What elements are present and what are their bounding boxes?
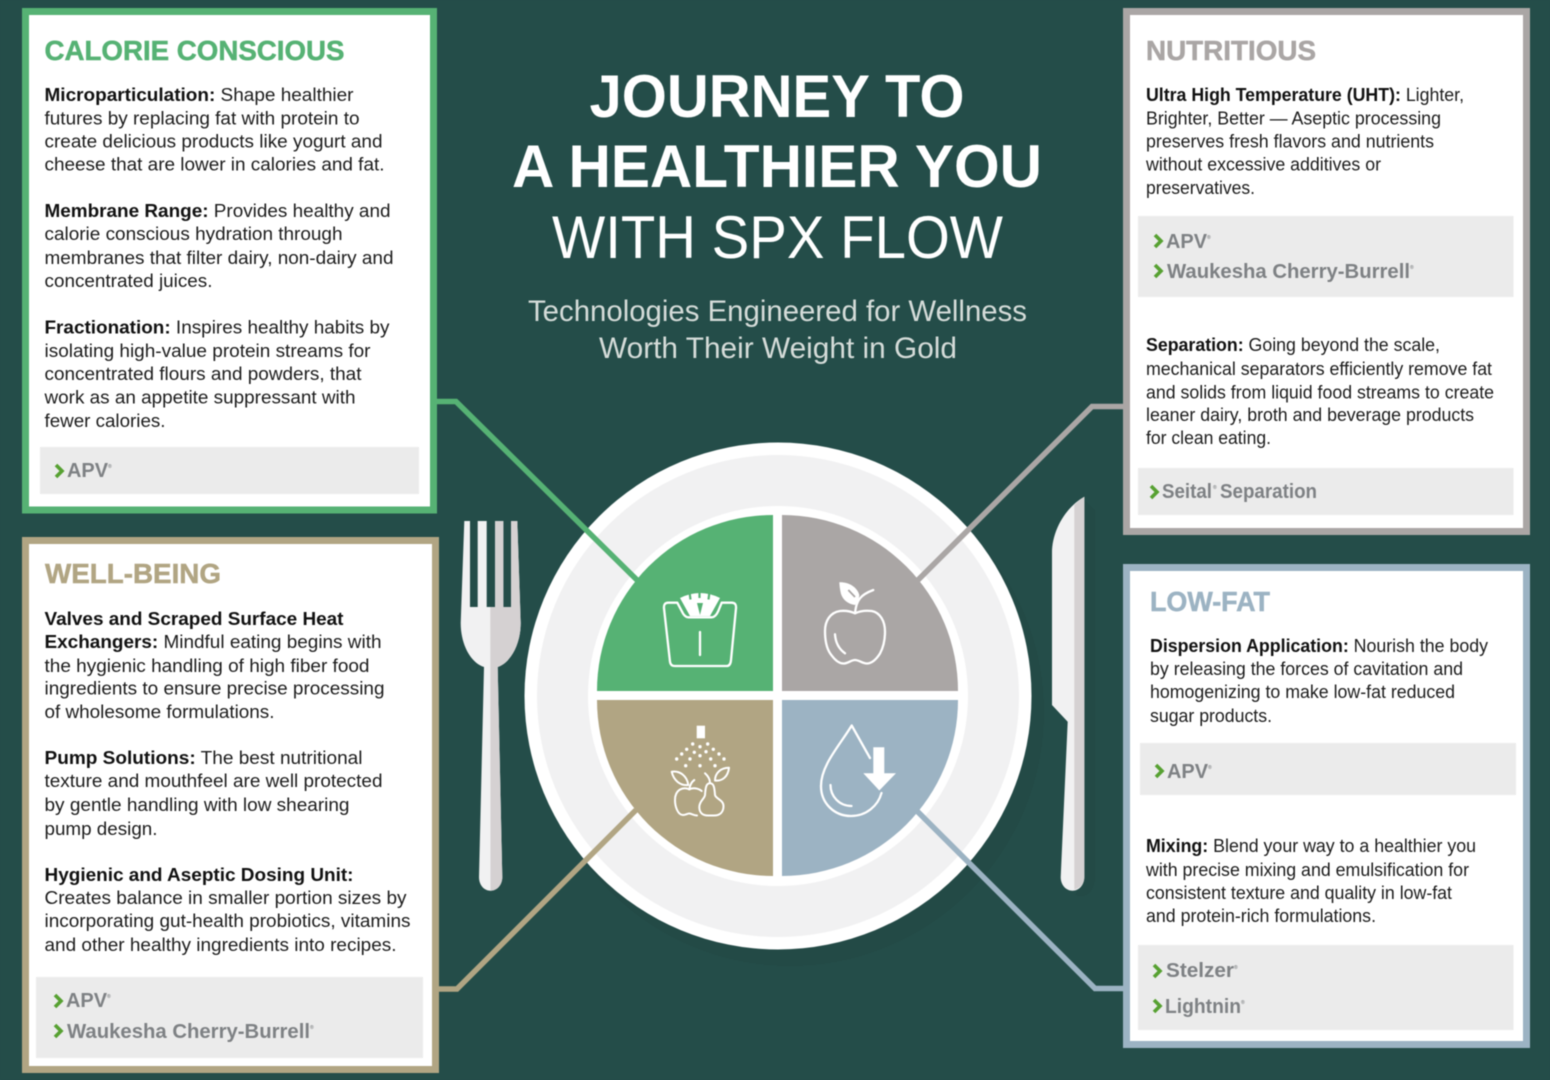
title: JOURNEY TO — [590, 63, 964, 130]
text block: separation: leaner dairy, broth and beverage products — [1146, 404, 1474, 425]
text block: membrane range: Membrane Range: Provides healthy and — [44, 200, 390, 221]
brand box: APV and Waukesha Cherry-Burrell: Waukesha Cherry-Burrell — [1167, 261, 1410, 283]
quadrant: tan well-being — [597, 700, 773, 876]
text block: microparticulation: create delicious products like yogurt and — [44, 130, 382, 152]
brand box: APV: APV — [67, 460, 109, 482]
text block: dispersion application: Dispersion Application: Nourish the body — [1150, 635, 1489, 656]
text block: separation — [1146, 334, 1494, 448]
quadrant: green calorie conscious — [597, 515, 773, 691]
quadrant: blue low-fat — [782, 700, 958, 876]
text block: membrane range — [44, 200, 394, 291]
connector: calorie conscious — [437, 402, 637, 580]
text block: valves and scraped surface heat exchangers: Valves and Scraped Surface Heat — [44, 608, 344, 629]
brand box: Stelzer and Lightnin: ® — [1234, 964, 1238, 971]
plate drop shadow — [536, 458, 1044, 966]
text block: pump solutions: texture and mouthfeel are well protected — [44, 770, 382, 791]
text block: valves and scraped surface heat exchangers: ingredients to ensure precise processing — [44, 678, 385, 698]
text block: separation: for clean eating. — [1146, 427, 1271, 448]
text block: mixing: and protein-rich formulations. — [1146, 905, 1376, 926]
brand box: Stelzer and Lightnin — [1138, 945, 1514, 1030]
brand box: APV: APV — [1167, 761, 1209, 783]
text block: hygienic and aseptic dosing unit: and other healthy ingredients into recipes. — [44, 934, 396, 955]
text block: dispersion application: by releasing the forces of cavitation and — [1150, 658, 1463, 679]
icon: spray over fruit — [672, 726, 729, 816]
brand box: APV: ® — [108, 463, 112, 470]
text block: separation: mechanical separators efficiently remove fat — [1146, 358, 1492, 379]
brand box: Stelzer and Lightnin: Stelzer — [1166, 960, 1234, 982]
brand box: APV and Waukesha Cherry-Burrell — [36, 977, 423, 1058]
subtitle: Technologies Engineered for Wellness — [528, 295, 1027, 328]
brand box: APV and Waukesha Cherry-Burrell: APV — [1166, 231, 1208, 253]
text block: ultra high temperature: preservatives. — [1146, 177, 1255, 198]
text block: dispersion application: homogenizing to make low-fat reduced — [1150, 681, 1455, 702]
text block: microparticulation: cheese that are lower in calories and fat. — [44, 154, 385, 174]
brand box: Seital Separation: Separation — [1220, 481, 1317, 503]
text block: separation: Separation: Going beyond the scale, — [1146, 334, 1440, 355]
text block: fractionation: Fractionation: Inspires healthy habits by — [44, 316, 390, 338]
brand box: APV and Waukesha Cherry-Burrell: ® — [310, 1024, 314, 1031]
icon: apple — [825, 582, 885, 664]
text block: valves and scraped surface heat exchangers — [44, 608, 385, 722]
brand box: Stelzer and Lightnin: Lightnin — [1165, 996, 1241, 1018]
text block: pump solutions: pump design. — [44, 818, 158, 839]
text block: ultra high temperature — [1145, 84, 1464, 198]
connector: nutritious — [918, 406, 1123, 580]
subtitle: Worth Their Weight in Gold — [599, 332, 957, 365]
text block: valves and scraped surface heat exchangers: Exchangers: Mindful eating begins with — [44, 631, 382, 652]
connector: well-being — [437, 810, 636, 989]
text block: membrane range: concentrated juices. — [44, 270, 212, 291]
panel: well-being — [26, 540, 436, 1070]
brand box: APV and Waukesha Cherry-Burrell: ® — [1410, 264, 1414, 271]
text block: pump solutions: by gentle handling with low shearing — [44, 794, 350, 815]
heading: low-fat: LOW-FAT — [1150, 586, 1270, 617]
text block: microparticulation: Microparticulation: Shape healthier — [44, 84, 354, 105]
text block: pump solutions: Pump Solutions: The best nutritional — [44, 747, 362, 768]
heading: calorie conscious: CALORIE CONSCIOUS — [44, 35, 344, 66]
plate — [524, 442, 1032, 950]
text block: dispersion application — [1150, 635, 1489, 726]
text block: mixing: with precise mixing and emulsification for — [1145, 859, 1469, 880]
text block: hygienic and aseptic dosing unit: incorporating gut-health probiotics, vitamins — [44, 910, 410, 931]
brand box: Seital Separation: Seital — [1162, 481, 1212, 503]
text block: membrane range: calorie conscious hydration through — [44, 223, 342, 244]
text block: valves and scraped surface heat exchangers: of wholesome formulations. — [44, 701, 274, 722]
brand box: APV and Waukesha Cherry-Burrell — [1138, 216, 1514, 297]
text block: fractionation: fewer calories. — [44, 410, 166, 431]
text block: fractionation: work as an appetite suppressant with — [43, 386, 355, 408]
knife shadow — [1075, 500, 1095, 896]
brand box: APV and Waukesha Cherry-Burrell: ® — [1207, 234, 1211, 241]
text block: hygienic and aseptic dosing unit: Hygienic and Aseptic Dosing Unit: — [44, 864, 354, 885]
heading: well-being: WELL-BEING — [45, 558, 221, 589]
icon: fork — [461, 521, 521, 891]
subtitle — [528, 295, 1027, 365]
text block: microparticulation: futures by replacing fat with protein to — [44, 108, 360, 128]
text block: mixing: consistent texture and quality in low-fat — [1146, 882, 1452, 903]
brand box: Stelzer and Lightnin: ® — [1241, 999, 1245, 1006]
brand box: Seital Separation: ® — [1213, 484, 1217, 491]
icon: knife — [1052, 497, 1084, 891]
text block: separation: and solids from liquid food streams to create — [1146, 382, 1494, 402]
brand box: APV and Waukesha Cherry-Burrell: ® — [107, 993, 111, 1000]
text block: ultra high temperature: Brighter, Better — Aseptic processing — [1146, 108, 1441, 128]
panel: low-fat — [1126, 568, 1526, 1044]
text block: hygienic and aseptic dosing unit — [44, 864, 410, 955]
text block: pump solutions — [44, 747, 382, 839]
brand box: APV — [40, 447, 419, 494]
panel: nutritious — [1126, 12, 1526, 532]
icon: weighing scale — [664, 590, 736, 666]
text block: dispersion application: sugar products. — [1150, 705, 1272, 726]
text block: mixing — [1145, 835, 1476, 926]
brand box: APV — [1140, 743, 1516, 795]
text block: fractionation: concentrated flours and powders, that — [44, 363, 362, 384]
text block: ultra high temperature: preserves fresh flavors and nutrients — [1146, 130, 1434, 152]
title — [512, 63, 1042, 271]
text block: valves and scraped surface heat exchangers: the hygienic handling of high fiber food — [44, 655, 370, 676]
brand box: APV and Waukesha Cherry-Burrell: Waukesha Cherry-Burrell — [67, 1021, 310, 1043]
brand box: APV: ® — [1208, 764, 1212, 771]
text block: mixing: Mixing: Blend your way to a healthier you — [1146, 835, 1476, 856]
brand box: Seital Separation — [1138, 468, 1514, 515]
quadrant: grey nutritious — [782, 515, 958, 691]
title: WITH SPX FLOW — [552, 204, 1003, 271]
panel: calorie conscious — [26, 12, 434, 510]
text block: ultra high temperature: Ultra High Temperature (UHT): Lighter, — [1146, 84, 1464, 105]
heading: nutritious: NUTRITIOUS — [1146, 35, 1316, 66]
text block: microparticulation — [44, 84, 385, 174]
title: A HEALTHIER YOU — [512, 133, 1042, 200]
icon: water drop with down arrow — [821, 726, 896, 816]
connector: low-fat — [917, 811, 1123, 988]
text block: fractionation — [43, 316, 390, 431]
text block: ultra high temperature: without excessive additives or — [1145, 154, 1381, 174]
text block: fractionation: isolating high-value protein streams for — [44, 340, 370, 361]
text block: hygienic and aseptic dosing unit: Creates balance in smaller portion sizes by — [44, 887, 407, 908]
text block: membrane range: membranes that filter dairy, non-dairy and — [44, 247, 394, 268]
brand box: APV and Waukesha Cherry-Burrell: APV — [66, 990, 108, 1012]
